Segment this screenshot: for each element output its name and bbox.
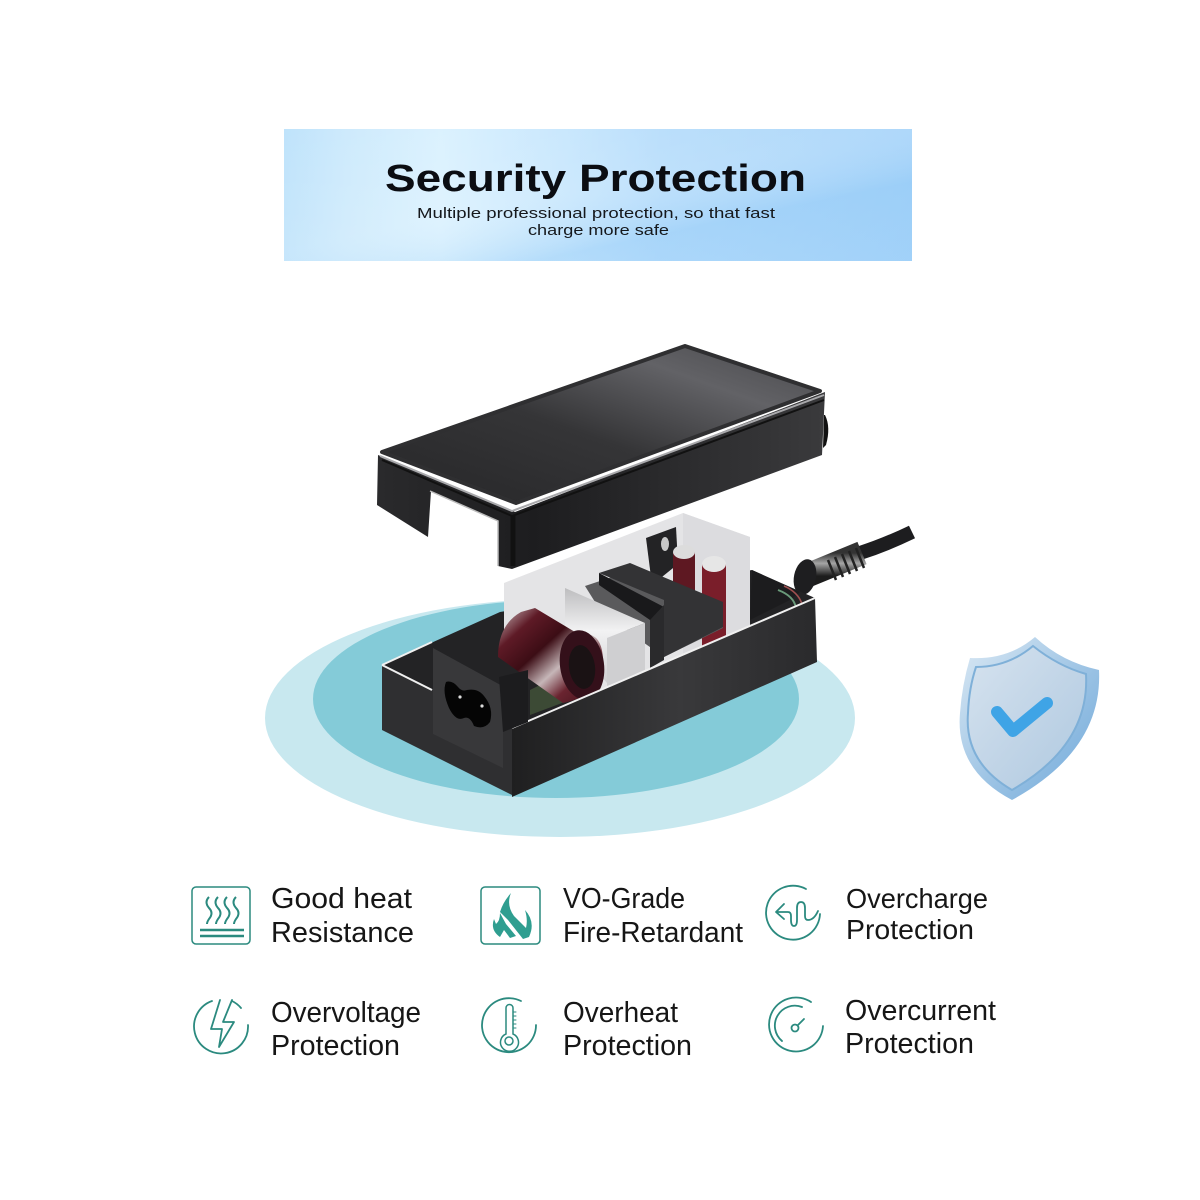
label: Overcharge	[846, 883, 988, 914]
label: Protection	[845, 1028, 974, 1060]
power adapter illustration	[377, 346, 912, 797]
transformer block	[585, 563, 723, 668]
white insulation sheet	[504, 513, 750, 700]
teal base ellipses	[265, 599, 855, 837]
subtitle: Multiple professional protection, so that fast	[417, 206, 775, 222]
icon: gauge	[769, 997, 823, 1051]
banner	[284, 129, 912, 261]
lid edges highlight	[380, 395, 824, 511]
heatsink clip	[646, 527, 678, 585]
feature: overvoltage	[194, 997, 421, 1062]
small capacitors	[673, 545, 726, 654]
power cord	[790, 532, 912, 597]
label	[271, 883, 414, 949]
check mark	[997, 703, 1047, 731]
feature: overcharge	[766, 883, 988, 945]
feature: fire retardant	[481, 883, 743, 949]
icon: lightning	[194, 1000, 248, 1053]
lid top face	[382, 346, 820, 503]
silver component	[565, 588, 645, 686]
label: Protection	[271, 1030, 400, 1062]
label	[563, 997, 692, 1062]
shield icon	[960, 637, 1099, 800]
label: Resistance	[271, 917, 414, 949]
label: Protection	[563, 1030, 692, 1062]
title: Security Protection	[385, 158, 806, 200]
label: VO-Grade	[563, 883, 685, 915]
feature: overcurrent	[769, 995, 996, 1060]
circuit board	[530, 675, 570, 715]
label: Overheat	[563, 997, 678, 1029]
label: Overvoltage	[271, 997, 421, 1029]
large capacitor	[498, 608, 609, 703]
label	[846, 883, 988, 945]
long side face	[512, 598, 817, 797]
lid side faces	[377, 392, 825, 569]
power socket	[433, 648, 528, 768]
icon: overcharge wave	[766, 886, 820, 940]
feature: overheat	[482, 997, 692, 1062]
feature: good heat resistance	[192, 883, 414, 949]
subtitle	[417, 206, 775, 239]
label	[845, 995, 996, 1060]
label	[271, 997, 421, 1062]
icon: heat	[192, 887, 250, 944]
subtitle: charge more safe	[528, 223, 669, 239]
label	[563, 883, 743, 949]
rim highlight	[382, 598, 815, 728]
icon: thermometer	[482, 998, 536, 1052]
label: Fire-Retardant	[563, 917, 743, 949]
label: Protection	[846, 914, 974, 945]
label: Overcurrent	[845, 995, 996, 1027]
box interior back	[382, 570, 815, 728]
front-left face	[382, 665, 512, 795]
label: Good heat	[271, 883, 412, 915]
icon: flame	[481, 887, 540, 944]
